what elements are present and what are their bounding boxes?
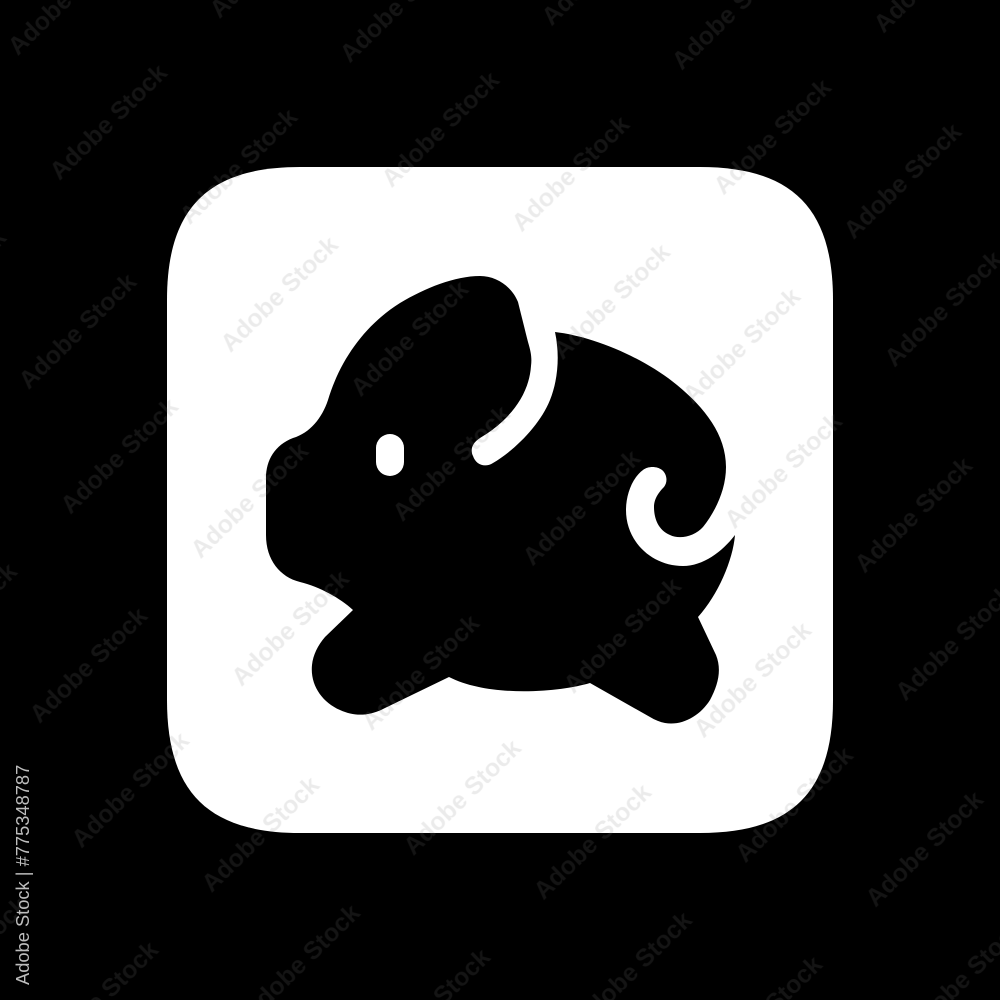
watermark: repeated Adobe Stock text: Adobe Stock (174, 103, 303, 230)
watermark: repeated Adobe Stock text: Adobe Stock (506, 110, 635, 237)
watermark: repeated Adobe Stock text: Adobe Stock (398, 734, 527, 861)
watermark: repeated Adobe Stock text: Adobe Stock (708, 73, 837, 200)
watermark: repeated Adobe Stock text: Adobe Stock (44, 59, 173, 185)
watermark: repeated Adobe Stock text: Adobe Stock (185, 437, 314, 564)
icon: black jumping pig silhouette (266, 276, 735, 724)
watermark: repeated Adobe Stock text: Adobe Stock (376, 66, 505, 193)
watermark: repeated Adobe Stock text: Adobe Stock (547, 238, 676, 365)
watermark: repeated Adobe Stock text: Adobe Stock (66, 726, 195, 853)
watermark: repeated Adobe Stock text: Adobe Stock (860, 785, 989, 912)
icon tile: white rounded square (167, 167, 833, 833)
watermark: repeated Adobe Stock text: Adobe Stock (719, 407, 848, 534)
watermark: repeated Adobe Stock text: Adobe Stock (838, 118, 967, 244)
watermark: repeated Adobe Stock text: Adobe Stock (849, 451, 978, 578)
icon: pig eye (376, 434, 404, 476)
watermark: repeated Adobe Stock text: Adobe Stock (730, 741, 859, 868)
watermark: repeated Adobe Stock text: Adobe Stock (528, 778, 657, 905)
watermark: repeated Adobe Stock text: Adobe Stock (677, 282, 806, 409)
watermark: repeated Adobe Stock text: Adobe Stock (215, 231, 344, 357)
watermark: repeated Adobe Stock text: Adobe Stock (688, 616, 817, 743)
watermark: repeated Adobe Stock text: Adobe Stock (345, 275, 474, 402)
watermark: repeated Adobe Stock text: Adobe Stock (226, 565, 355, 691)
watermark: repeated Adobe Stock text: Adobe Stock (55, 392, 184, 519)
watermark: repeated Adobe Stock text: Adobe Stock (517, 444, 646, 571)
watermark: repeated Adobe Stock text: Adobe Stock (196, 771, 325, 898)
watermark: repeated Adobe Stock text: Adobe Stock (387, 400, 516, 527)
side credit text: Adobe Stock | #775348787 (12, 765, 33, 985)
watermark: repeated Adobe Stock text: Adobe Stock (356, 609, 485, 736)
watermark: repeated Adobe Stock text: Adobe Stock (558, 572, 687, 699)
watermark: repeated Adobe Stock text: Adobe Stock (24, 602, 153, 728)
watermark: repeated Adobe Stock text: Adobe Stock (13, 268, 142, 394)
